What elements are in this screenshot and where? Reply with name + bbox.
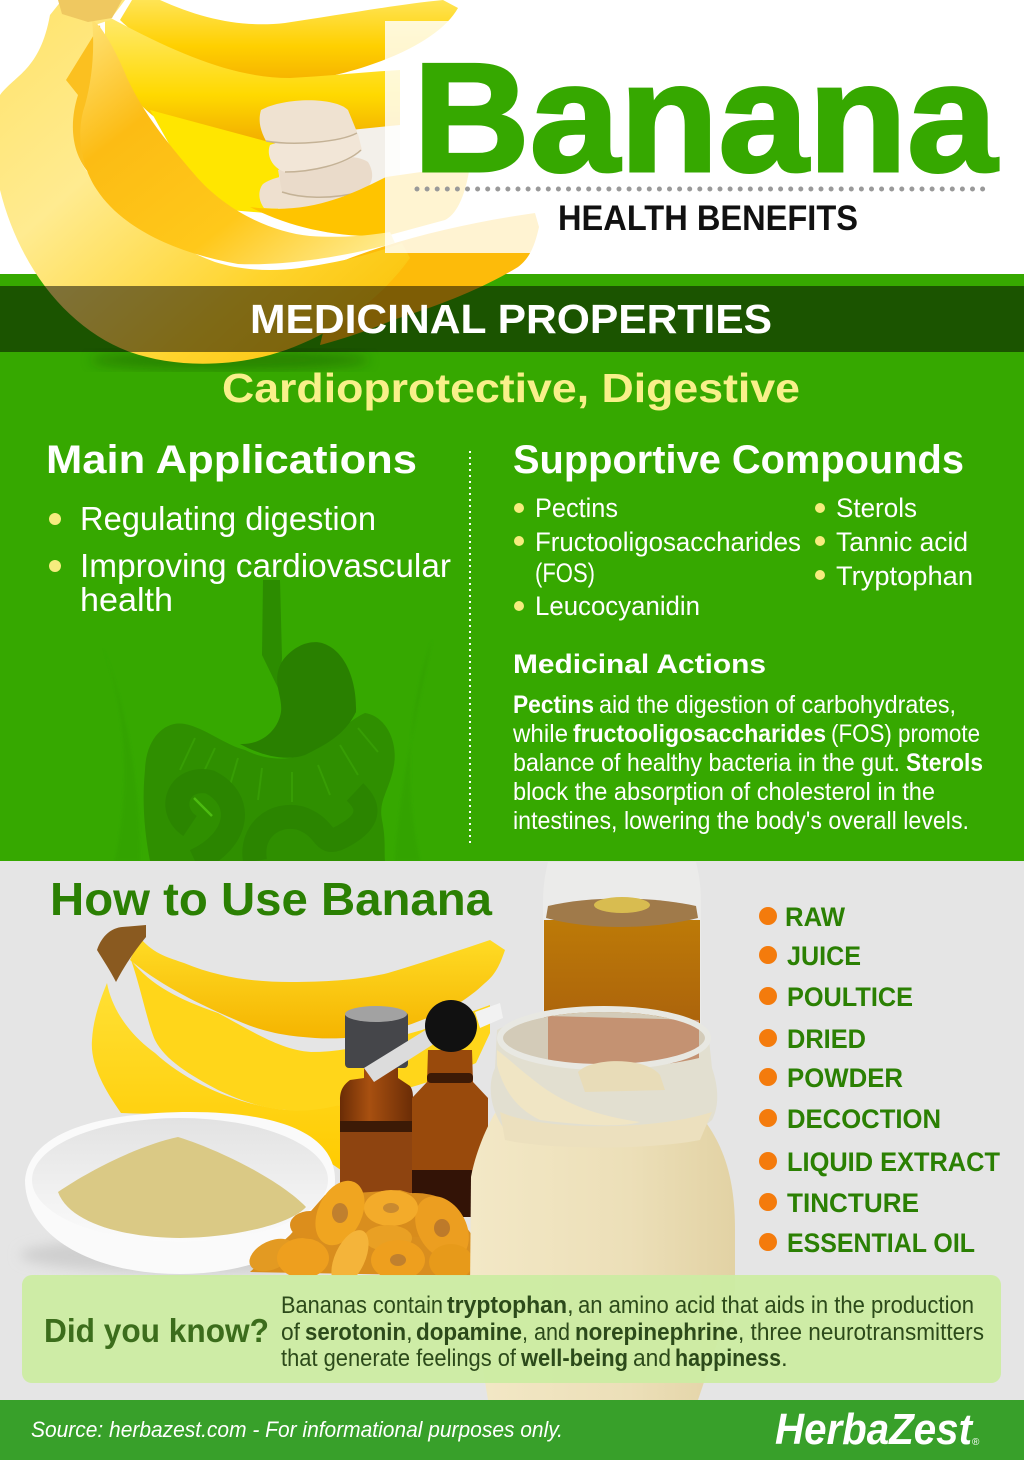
list item 1: Regulating digestion [80, 500, 376, 537]
banana stem [97, 925, 146, 982]
callout text: serotonin [305, 1319, 406, 1346]
paragraph: medicinal actions: aid the digestion of carbohydrates, [599, 691, 956, 719]
photo: bowl of banana powder [20, 1112, 360, 1274]
heading: how to use banana: How to Use Banana [50, 873, 492, 925]
back banana [120, 0, 458, 84]
banana slices [259, 100, 372, 209]
compounds list: Sterols [836, 493, 917, 523]
photo: essential oil bottles [340, 1000, 503, 1217]
paragraph: medicinal actions: Pectins [513, 691, 594, 719]
heading: medicinal actions: Medicinal Actions [513, 649, 766, 679]
powder [58, 1137, 306, 1238]
logo: HerbaZest: ® [972, 1437, 980, 1448]
banana under rear [250, 165, 470, 236]
list item 2: health [80, 581, 173, 618]
thread smear [497, 1050, 640, 1125]
callout text: , and [522, 1319, 570, 1346]
list: forms of use: LIQUID EXTRACT [787, 1147, 1000, 1177]
banana lump [578, 1061, 665, 1092]
list: forms of use: DECOCTION [787, 1104, 941, 1134]
footer bar [0, 1400, 1024, 1460]
list: forms of use: TINCTURE [787, 1188, 919, 1218]
photo: bottle of amber liquid [543, 862, 701, 1040]
drop shadow [90, 350, 370, 370]
paragraph: medicinal actions: balance of healthy bacteria in the gut. [513, 749, 900, 777]
illustration: torso and digestive system [144, 580, 395, 861]
stomach [240, 642, 356, 758]
large and small intestine mass [144, 713, 395, 861]
dropper cap [425, 1000, 477, 1052]
panel: how to use background [0, 861, 1024, 1400]
list: forms of use [759, 902, 1000, 1258]
photo: bananas bunch [92, 925, 505, 1172]
callout text: tryptophan [447, 1292, 567, 1319]
callout text: Bananas contain [281, 1292, 443, 1319]
stem highlight [58, 0, 122, 22]
jar mouth [502, 1012, 706, 1068]
esophagus [262, 580, 282, 690]
logo: HerbaZest: HerbaZest [775, 1405, 974, 1454]
yellow banana behind slices [150, 110, 280, 214]
bottom banana [92, 983, 345, 1172]
compounds list: Tryptophan [836, 561, 973, 591]
torso silhouette [100, 640, 432, 861]
list item 2 [49, 547, 451, 618]
callout text: and [633, 1345, 671, 1372]
bottle seen through jar [548, 1016, 699, 1066]
panel: medicinal properties background [0, 274, 1024, 861]
list: forms of use: RAW [785, 902, 845, 932]
callout text: . [781, 1345, 788, 1372]
paragraph: medicinal actions: fructooligosaccharides [573, 720, 826, 748]
photo: banana bunch with slices [0, 0, 539, 370]
bowl interior [32, 1118, 328, 1242]
middle banana [80, 20, 395, 264]
list: forms of use: ESSENTIAL OIL [787, 1228, 975, 1258]
panel: main applications [46, 438, 451, 618]
compounds list: Fructooligosaccharides [535, 527, 801, 557]
front banana [0, 0, 410, 364]
chips backing [250, 1190, 472, 1276]
photo: dried banana chips [249, 1180, 470, 1275]
callout: did you know [22, 1275, 1001, 1383]
callout text: , three neurotransmitters [738, 1319, 984, 1346]
shadow [20, 1237, 360, 1273]
jar body [470, 1113, 735, 1400]
compounds list: Tannic acid [836, 527, 968, 557]
colon segments [180, 728, 378, 802]
callout text: well-being [520, 1345, 628, 1372]
jar neck glass [491, 1014, 717, 1139]
list: forms of use: JUICE [787, 941, 861, 971]
paragraph: medicinal actions: Sterols [906, 749, 983, 777]
title: Banana [413, 31, 999, 204]
compounds list: Pectins [535, 493, 618, 523]
callout text: , [567, 1292, 574, 1319]
pale backdrop beside slices [300, 125, 400, 210]
small intestine loops [177, 781, 365, 861]
glass [543, 862, 701, 1040]
paragraph: medicinal actions: (FOS) promote [831, 720, 980, 748]
meniscus [546, 898, 698, 927]
callout text: of [281, 1319, 300, 1346]
middle banana [131, 960, 490, 1111]
compounds list [514, 493, 973, 621]
smoothie collar [500, 1112, 712, 1148]
subheading: properties: Cardioprotective, Digestive [222, 365, 800, 411]
paragraph: medicinal actions: block the absorption of cholesterol in the [513, 778, 935, 806]
compounds list: (FOS) [535, 558, 595, 588]
heading: supportive compounds: Supportive Compounds [513, 438, 964, 482]
translucent title panel [385, 21, 1024, 253]
liquid [544, 920, 700, 1040]
photo: jar of banana smoothie [470, 1009, 735, 1400]
shaded banana inner neck [66, 25, 112, 192]
right lower banana [320, 213, 539, 345]
right bottle [412, 1050, 488, 1217]
source note: Source: herbazest.com - For informational purposes only. [31, 1417, 563, 1442]
callout box [22, 1275, 1001, 1383]
header dark band [0, 286, 1024, 352]
second back banana [105, 15, 400, 148]
callout text: an amino acid that aids in the production [578, 1292, 974, 1319]
panel: supportive compounds [513, 438, 973, 621]
bright slit [194, 798, 212, 816]
top banana [130, 938, 505, 1038]
header background [0, 0, 1024, 274]
callout text: norepinephrine [575, 1319, 738, 1346]
liquid highlight [594, 897, 650, 913]
dotted column divider [469, 451, 471, 845]
callout heading: Did you know? [44, 1312, 269, 1349]
paragraph: medicinal actions: while [512, 720, 568, 748]
panel: medicinal actions [512, 649, 990, 835]
list: forms of use: POWDER [787, 1063, 903, 1093]
dropper [364, 1026, 440, 1082]
callout text: that generate feelings of [281, 1345, 516, 1372]
dotted divider [417, 186, 990, 192]
list: forms of use: POULTICE [787, 982, 913, 1012]
heading: main applications: Main Applications [46, 438, 417, 482]
callout text: happiness [675, 1345, 781, 1372]
list item 2: Improving cardiovascular [80, 547, 451, 584]
heading: medicinal properties: MEDICINAL PROPERTIES [250, 296, 772, 342]
callout text: , [406, 1319, 413, 1346]
subtitle: HEALTH BENEFITS [558, 199, 858, 238]
callout text: dopamine [416, 1319, 522, 1346]
compounds list: Leucocyanidin [535, 591, 700, 621]
jar rim [500, 1009, 708, 1067]
list: forms of use: DRIED [787, 1024, 866, 1054]
paragraph: medicinal actions: intestines, lowering the body's overall levels. [513, 807, 969, 835]
bowl [25, 1112, 335, 1274]
left bottle [340, 1006, 413, 1193]
